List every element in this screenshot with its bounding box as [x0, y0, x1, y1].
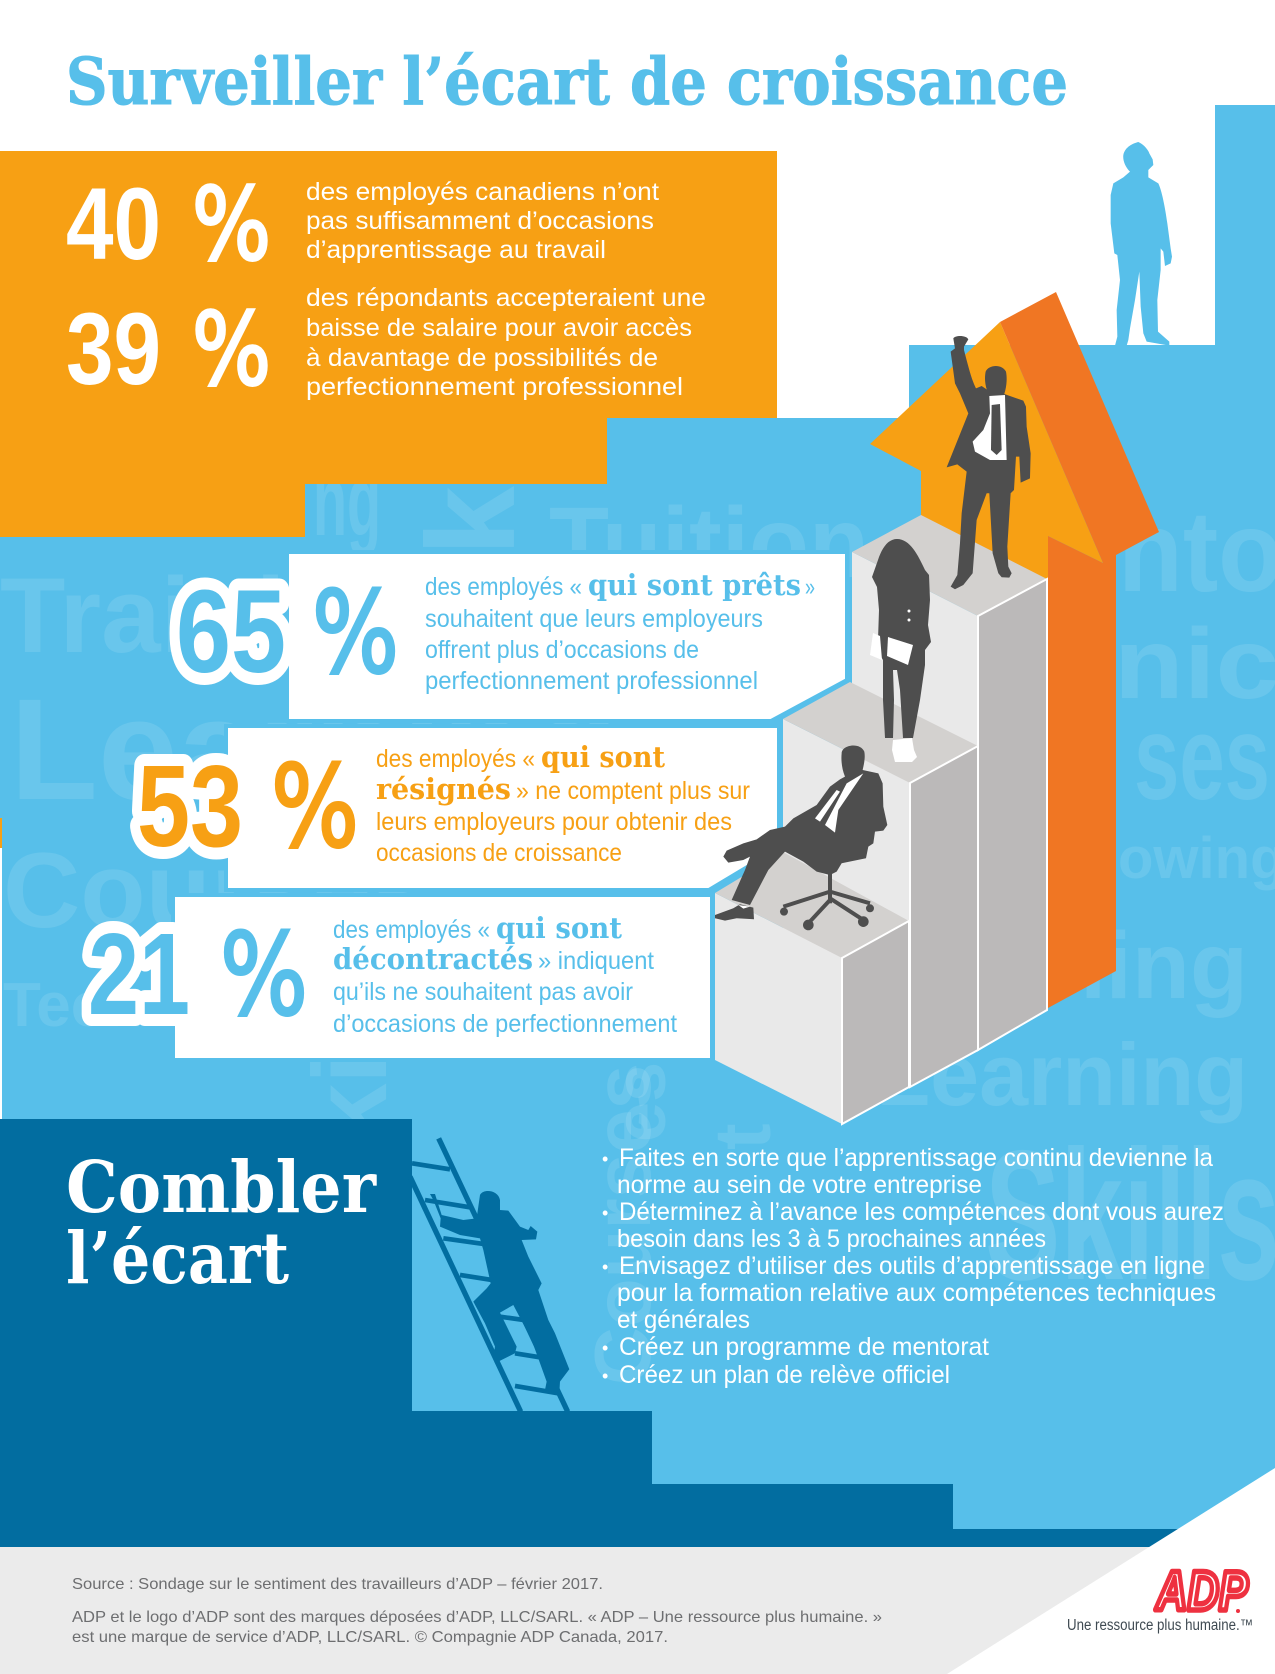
stat: 39 %: [66, 291, 271, 408]
text: 21 % description: des employés «: [333, 916, 490, 944]
text: 65 % description: [425, 568, 815, 695]
list: recommendations: •: [602, 1149, 608, 1169]
title: Surveiller l’écart de croissance: [66, 44, 1068, 120]
heading: Combler l'écart: l’écart: [66, 1216, 289, 1300]
list: recommendations: et générales: [617, 1306, 750, 1334]
text: 65 % description: perfectionnement professionnel: [425, 667, 758, 695]
stat: 21 %: 21: [88, 909, 190, 1039]
background: faded training words: rning: [1011, 913, 1248, 1019]
footer: source and legal text: [72, 1576, 882, 1646]
list: recommendations: besoin dans les 3 à 5 prochaines années: [617, 1225, 1046, 1253]
text: 39 % description: [306, 284, 706, 401]
icon: businessman raising fist: [947, 336, 1031, 589]
stat: 65 %: [176, 566, 399, 699]
text: 21 % description: » indiquent: [538, 947, 654, 975]
text: 39 % description: baisse de salaire pour avoir accès: [306, 314, 692, 342]
text: 65 % description: qui sont prêts: [588, 568, 801, 602]
list: recommendations: •: [602, 1203, 608, 1223]
panel: 21 % callout box: [173, 895, 712, 1060]
icon: woman with folder: [870, 539, 931, 762]
list: recommendations: •: [602, 1366, 608, 1386]
list: recommendations: Créez un plan de relève officiel: [619, 1361, 950, 1389]
background: faded training words: nic: [1114, 608, 1275, 720]
stat: 40 %: 40: [66, 167, 161, 281]
panel: 53 % callout box: [226, 726, 779, 890]
background: faded training words: Courses: [578, 1065, 667, 1385]
text: 65 % description: »: [805, 573, 815, 601]
list: recommendations: Faites en sorte que l’apprentissage continu devienne la: [619, 1144, 1213, 1172]
list: recommendations: •: [602, 1338, 608, 1358]
text: 40 % description: d’apprentissage au travail: [306, 236, 606, 264]
logo: ADP: ADP: [1154, 1559, 1249, 1622]
panel: dark blue staircase: [0, 1119, 1200, 1547]
stat: 21 %: %: [220, 909, 308, 1041]
text: 53 % description: résignés: [376, 772, 511, 806]
list: recommendations: [602, 1144, 1224, 1389]
stat: 39 %: %: [192, 291, 271, 408]
left edge slivers: [0, 818, 2, 1120]
list: recommendations: Créez un programme de mentorat: [619, 1333, 989, 1361]
heading: Combler l'écart: [66, 1145, 377, 1300]
footer: source and legal text: ADP et le logo d’ADP sont des marques déposées d’ADP, LLC/SARL. « ADP – Une ressource plus humaine. »: [72, 1609, 882, 1626]
stat: 39 %: 39: [66, 292, 161, 406]
background: faded training words: t: [698, 1123, 787, 1150]
text: 53 % description: qui sont: [541, 740, 666, 774]
panel: orange statistics: [0, 151, 777, 537]
text: 65 % description: des employés «: [425, 573, 582, 601]
stat: 53 %: %: [271, 741, 359, 873]
footer: source and legal text: Source : Sondage sur le sentiment des travailleurs d’ADP – février 2017.: [72, 1576, 603, 1593]
footer band: [0, 1547, 1160, 1674]
text: 40 % description: des employés canadiens n’ont: [306, 178, 659, 206]
panel: 65 % callout box: [287, 552, 847, 721]
text: 21 % description: [333, 911, 677, 1038]
heading: Combler l'écart: Combler: [66, 1145, 377, 1229]
text: 21 % description: qui sont: [496, 911, 623, 945]
text: 39 % description: à davantage de possibilités de: [306, 344, 658, 372]
icon: seated man in office chair: [715, 745, 887, 930]
stat: 53 %: 53: [137, 741, 243, 871]
stat: 40 %: %: [192, 166, 271, 283]
stat: 53 %: [137, 741, 359, 873]
list: recommendations: norme au sein de votre entreprise: [617, 1171, 982, 1199]
icon: man looking up: [1111, 142, 1172, 346]
list: recommendations: pour la formation relative aux compétences techniques: [617, 1279, 1216, 1307]
stat: 65 %: 65: [176, 566, 286, 698]
background: faded training words: ok: [402, 486, 541, 632]
text: 53 % description: leurs employeurs pour obtenir des: [376, 808, 732, 836]
footer: source and legal text: est une marque de service d’ADP, LLC/SARL. © Compagnie ADP Canada, 2017.: [72, 1629, 668, 1646]
background: faded training words: ki: [292, 1054, 409, 1142]
text: 39 % description: perfectionnement professionnel: [306, 373, 683, 401]
text: 53 % description: [376, 740, 750, 867]
list: recommendations: Envisagez d’utiliser des outils d’apprentissage en ligne: [619, 1252, 1205, 1280]
stat: 65 %: %: [312, 567, 399, 699]
background: faded training words: Learning: [876, 1025, 1248, 1124]
background: faded training words: Tech: [3, 971, 143, 1040]
text: 53 % description: occasions de croissance: [376, 839, 622, 867]
list: recommendations: Déterminez à l’avance les compétences dont vous aurez: [619, 1198, 1224, 1226]
background: faded training words: Tuition: [549, 487, 869, 599]
white corner triangle: [947, 1468, 1275, 1674]
text: 40 % description: [306, 178, 659, 264]
text: 65 % description: offrent plus d’occasions de: [425, 636, 699, 664]
text: 65 % description: souhaitent que leurs employeurs: [425, 605, 763, 633]
text: 21 % description: décontractés: [333, 942, 533, 976]
text: 39 % description: des répondants accepteraient une: [306, 284, 706, 312]
background: faded training words: ng: [313, 445, 381, 557]
text: 53 % description: » ne comptent plus sur: [516, 777, 750, 805]
arrow: orange growth arrow: [870, 292, 1159, 1008]
text: 40 % description: pas suffisamment d’occasions: [306, 207, 654, 235]
stat: 40 %: [66, 166, 271, 283]
background: faded training words: [0, 445, 1275, 1385]
list: recommendations: •: [602, 1257, 608, 1277]
text: 21 % description: d’occasions de perfectionnement: [333, 1010, 677, 1038]
stat: 21 %: [88, 909, 308, 1041]
chart: isometric staircase: [715, 515, 1047, 1124]
text: 21 % description: qu’ils ne souhaitent pas avoir: [333, 978, 633, 1006]
icon: man climbing ladder: [410, 1138, 569, 1412]
background: faded training words: Courses: [3, 830, 431, 950]
background: faded training words: Learning: [10, 669, 618, 830]
text: 53 % description: des employés «: [376, 745, 535, 773]
background: faded training words: es: [601, 1062, 681, 1142]
background: faded training words: Training: [0, 555, 416, 675]
